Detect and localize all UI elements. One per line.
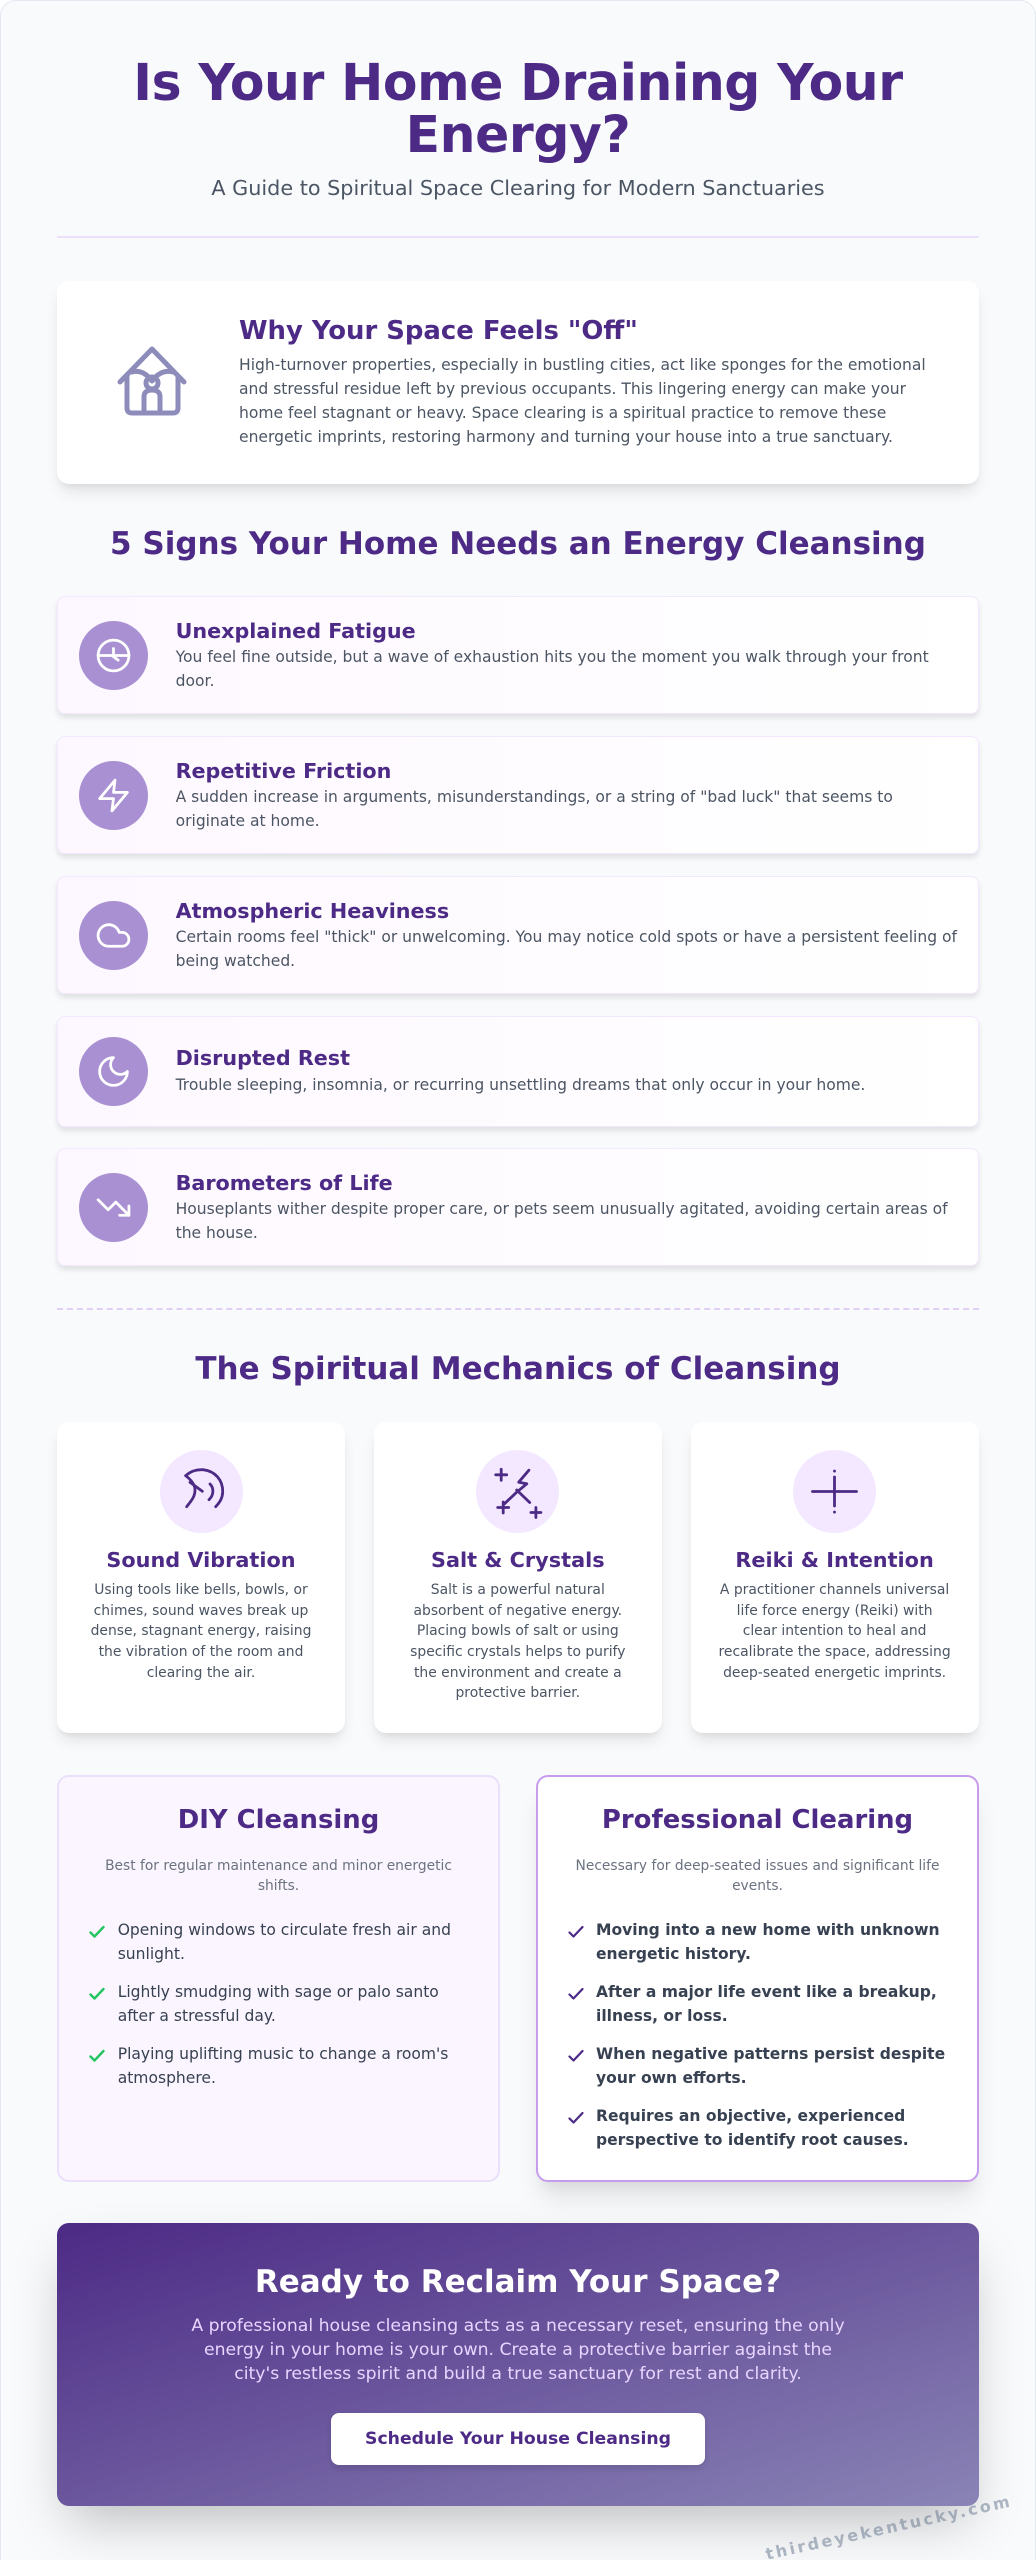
- sign text: [176, 928, 958, 970]
- professional subtitle: Necessary for deep-seated issues and significant life: [576, 1858, 939, 1874]
- item: after a stressful day.: [118, 2007, 276, 2025]
- CTA text: energy in your home is your own. Create a protective barrier against the: [204, 2340, 832, 2360]
- sign text: [176, 788, 893, 830]
- panel: sign 1: [57, 596, 979, 714]
- professional title: Professional Clearing: [602, 1805, 913, 1835]
- title: [133, 53, 903, 164]
- sign text: Certain rooms feel "thick" or unwelcoming. You may notice cold spots or have a persistent feeling of: [176, 928, 957, 946]
- card text: Placing bowls of salt or using: [417, 1623, 619, 1639]
- professional list: [568, 1921, 945, 2149]
- title: Is Your Home Draining Your: [133, 53, 903, 112]
- item: [118, 1983, 439, 2025]
- item: [118, 2045, 448, 2087]
- item: energetic history.: [596, 1945, 751, 1963]
- CTA button: Schedule Your House Cleansing: [365, 2429, 671, 2449]
- icon: lightning: [79, 761, 148, 830]
- sign text: [176, 648, 929, 690]
- sign text: You feel fine outside, but a wave of exhaustion hits you the moment you walk through your front: [176, 648, 929, 666]
- card title: Salt & Crystals: [431, 1548, 605, 1572]
- item: sunlight.: [118, 1945, 185, 1963]
- card text: protective barrier.: [455, 1685, 580, 1701]
- icon: trending down: [79, 1173, 148, 1242]
- card text: dense, stagnant energy, raising: [91, 1623, 311, 1639]
- item: illness, or loss.: [596, 2007, 728, 2025]
- sign text: [176, 1200, 948, 1242]
- card title: Sound Vibration: [106, 1548, 296, 1572]
- check: [89, 2050, 105, 2062]
- heading: mechanics: The Spiritual Mechanics of Cleansing: [195, 1351, 841, 1387]
- card title: Reiki & Intention: [735, 1548, 934, 1572]
- check: [89, 1926, 105, 1938]
- item: Moving into a new home with unknown: [596, 1921, 940, 1939]
- panel: why your space feels off: [57, 281, 979, 484]
- item: Lightly smudging with sage or palo santo: [118, 1983, 439, 2001]
- icon: cloud: [79, 901, 148, 970]
- card text: specific crystals helps to purify: [410, 1644, 625, 1660]
- DIY subtitle: Best for regular maintenance and minor energetic: [105, 1858, 452, 1874]
- check: [568, 2112, 584, 2124]
- sign text: Houseplants wither despite proper care, or pets seem unusually agitated, avoiding certain areas of: [176, 1200, 948, 1218]
- panel: professional clearing: [536, 1775, 979, 2182]
- sign title: Atmospheric Heaviness: [176, 898, 449, 922]
- DIY list: [89, 1921, 451, 2087]
- text: why body: [239, 356, 926, 446]
- card text: clearing the air.: [147, 1665, 255, 1681]
- item: [596, 2045, 945, 2087]
- item: [596, 1921, 940, 1963]
- card text: [719, 1582, 951, 1681]
- panel: sign 5: [57, 1148, 979, 1266]
- card text: Using tools like bells, bowls, or: [94, 1582, 308, 1598]
- DIY subtitle: shifts.: [258, 1878, 299, 1894]
- text: why body: High-turnover properties, especially in bustling cities, act like sponges for the emotional: [239, 356, 926, 374]
- title: Energy?: [406, 105, 630, 164]
- sign title: Barometers of Life: [176, 1170, 393, 1194]
- item: Opening windows to circulate fresh air and: [118, 1921, 451, 1939]
- card text: [410, 1582, 625, 1701]
- panel: DIY cleansing: [57, 1775, 500, 2182]
- panel: sign 2: [57, 736, 979, 854]
- card text: absorbent of negative energy.: [413, 1603, 622, 1619]
- DIY title: DIY Cleansing: [178, 1805, 379, 1835]
- card text: the environment and create a: [414, 1665, 622, 1681]
- text: why body: and stressful residue left by previous occupants. This lingering energy can make your: [239, 380, 906, 398]
- icon: fatigue: [79, 621, 148, 690]
- icon: reiki: [793, 1450, 876, 1532]
- card text: [91, 1582, 311, 1681]
- card text: deep-seated energetic imprints.: [723, 1665, 946, 1681]
- sign title: Unexplained Fatigue: [176, 618, 416, 642]
- card text: recalibrate the space, addressing: [719, 1644, 951, 1660]
- sign title: Disrupted Rest: [176, 1046, 350, 1070]
- sign text: the house.: [176, 1224, 258, 1242]
- professional subtitle: events.: [732, 1878, 783, 1894]
- check: [568, 1988, 584, 2000]
- panel: salt and crystals: [374, 1422, 662, 1732]
- panel: call to action: [57, 2223, 979, 2506]
- sign text: Trouble sleeping, insomnia, or recurring unsettling dreams that only occur in your home.: [176, 1076, 865, 1094]
- icon: moon: [79, 1037, 148, 1106]
- heading: why: Why Your Space Feels "Off": [239, 316, 638, 346]
- CTA text: [191, 2316, 845, 2384]
- text: why body: home feel stagnant or heavy. Space clearing is a spiritual practice to remove these: [239, 404, 886, 422]
- sign text: being watched.: [176, 952, 295, 970]
- item: When negative patterns persist despite: [596, 2045, 945, 2063]
- card text: life force energy (Reiki) with: [737, 1603, 933, 1619]
- heading: 5 signs: 5 Signs Your Home Needs an Energy Cleansing: [110, 526, 926, 562]
- professional subtitle: [576, 1858, 939, 1894]
- item: Playing uplifting music to change a room's: [118, 2045, 448, 2063]
- card text: the vibration of the room and: [99, 1644, 303, 1660]
- check: [568, 1926, 584, 1938]
- CTA text: A professional house cleansing acts as a necessary reset, ensuring the only: [191, 2316, 845, 2336]
- DIY subtitle: [105, 1858, 452, 1894]
- sign text: originate at home.: [176, 812, 320, 830]
- panel: sign 4: [57, 1016, 979, 1127]
- item: [596, 1983, 937, 2025]
- panel: reiki and intention: [691, 1422, 979, 1732]
- check: [568, 2050, 584, 2062]
- subtitle: A Guide to Spiritual Space Clearing for Modern Sanctuaries: [211, 176, 825, 200]
- icon: sound: [160, 1450, 242, 1532]
- card text: clear intention to heal and: [743, 1623, 926, 1639]
- sign text: A sudden increase in arguments, misunderstandings, or a string of "bad luck" that seems to: [176, 788, 893, 806]
- card text: A practitioner channels universal: [720, 1582, 949, 1598]
- item: perspective to identify root causes.: [596, 2131, 909, 2149]
- card text: chimes, sound waves break up: [94, 1603, 308, 1619]
- icon: house: [118, 346, 186, 416]
- panel: sound vibration: [57, 1422, 345, 1732]
- icon: salt: [476, 1450, 559, 1532]
- sign title: Repetitive Friction: [176, 758, 391, 782]
- item: atmosphere.: [118, 2069, 216, 2087]
- CTA heading: Ready to Reclaim Your Space?: [255, 2264, 781, 2300]
- item: After a major life event like a breakup,: [596, 1983, 937, 2001]
- CTA text: city's restless spirit and build a true sanctuary for rest and clarity.: [234, 2364, 802, 2384]
- panel: sign 3: [57, 876, 979, 994]
- text: why body: energetic imprints, restoring harmony and turning your house into a true sanctuary.: [239, 428, 893, 446]
- sign text: door.: [176, 672, 214, 690]
- item: Requires an objective, experienced: [596, 2107, 905, 2125]
- card text: Salt is a powerful natural: [431, 1582, 605, 1598]
- item: [118, 1921, 451, 1963]
- check: [89, 1988, 105, 2000]
- item: [596, 2107, 909, 2149]
- item: your own efforts.: [596, 2069, 747, 2087]
- CTA button: [331, 2413, 705, 2465]
